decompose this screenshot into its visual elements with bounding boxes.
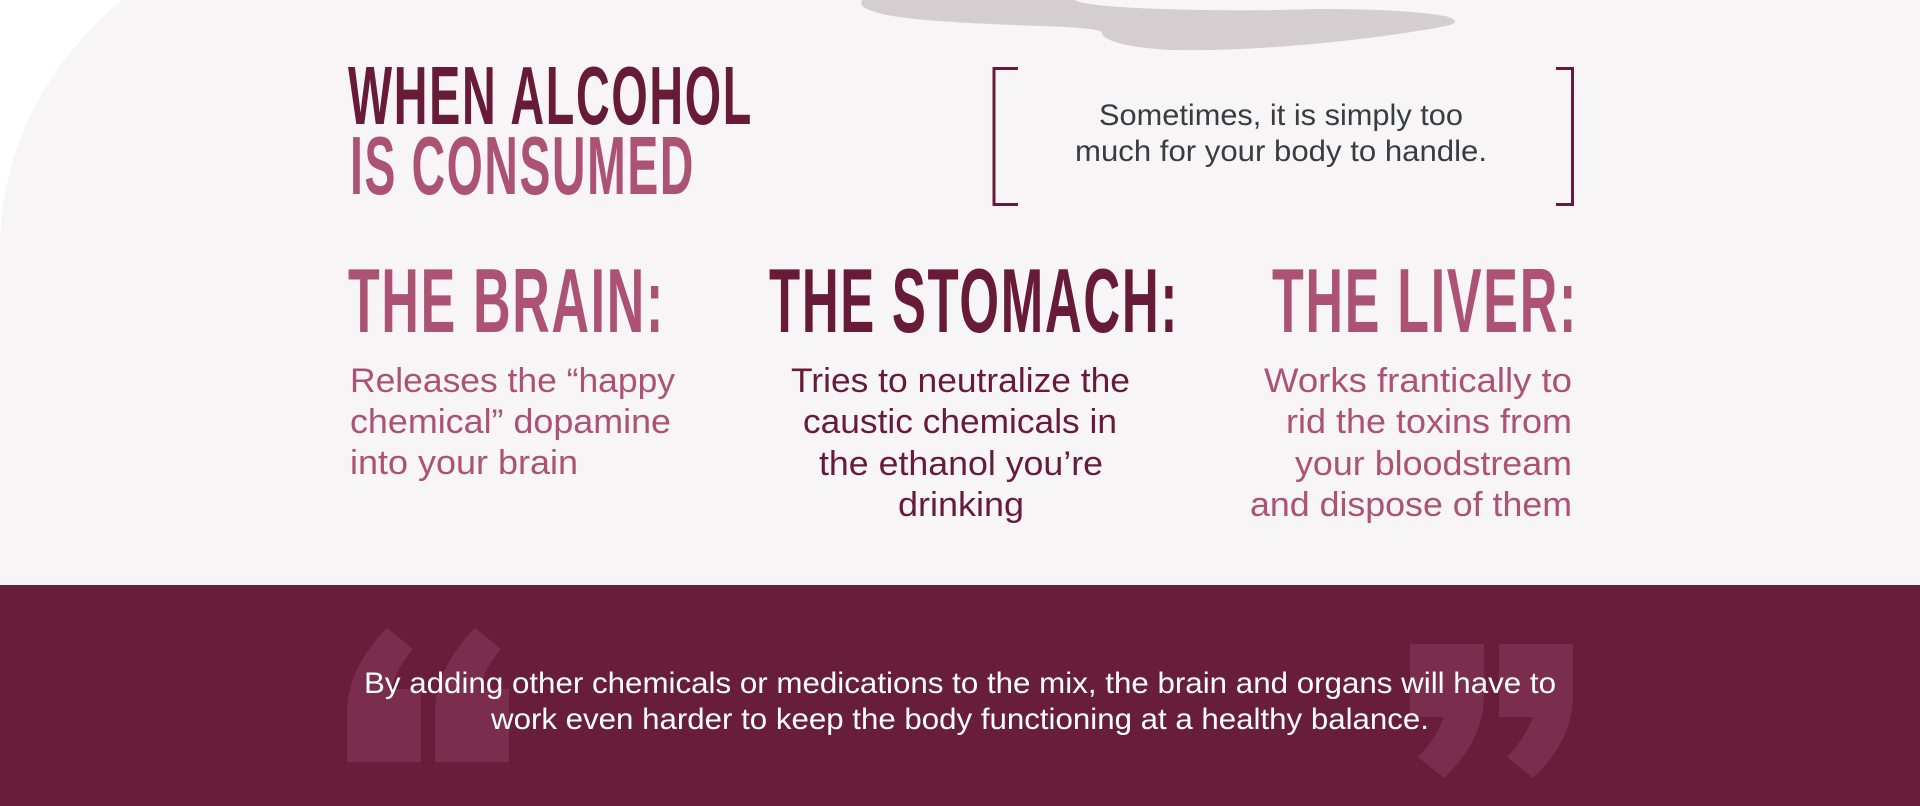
liver description bbox=[1250, 362, 1572, 524]
stomach description: the ethanol you’re bbox=[819, 445, 1103, 483]
stomach description: Tries to neutralize the bbox=[791, 362, 1130, 400]
column: the brain bbox=[348, 251, 675, 482]
liver description: your bloodstream bbox=[1295, 445, 1572, 483]
decorative shadow blob bbox=[861, 0, 1455, 50]
callout with brackets bbox=[994, 68, 1572, 204]
quote text bbox=[364, 667, 1556, 736]
icon: closing quotation mark bbox=[1410, 644, 1573, 778]
title bbox=[348, 49, 753, 212]
left bracket bbox=[994, 68, 1018, 204]
liver description: Works frantically to bbox=[1264, 362, 1572, 400]
callout text bbox=[1075, 99, 1487, 168]
title: IS CONSUMED bbox=[350, 119, 695, 212]
brain description: into your brain bbox=[350, 444, 578, 482]
title: WHEN ALCOHOL bbox=[348, 49, 753, 142]
heading: the stomach: THE STOMACH: bbox=[769, 251, 1179, 352]
liver description: and dispose of them bbox=[1250, 486, 1572, 524]
liver description: rid the toxins from bbox=[1286, 403, 1572, 441]
brain description bbox=[350, 362, 675, 482]
column: the stomach bbox=[769, 251, 1179, 524]
stomach description bbox=[791, 362, 1130, 524]
icon: opening quotation mark bbox=[347, 628, 509, 762]
stomach description: caustic chemicals in bbox=[803, 403, 1117, 441]
heading: the brain: THE BRAIN: bbox=[348, 251, 665, 352]
stomach description: drinking bbox=[898, 486, 1024, 524]
band background bbox=[0, 585, 1920, 806]
brain description: chemical” dopamine bbox=[350, 403, 671, 441]
column: the liver bbox=[1250, 251, 1578, 524]
callout text: Sometimes, it is simply too bbox=[1099, 99, 1463, 132]
quote text: By adding other chemicals or medications to the mix, the brain and organs will have to bbox=[364, 667, 1556, 700]
heading: the liver: THE LIVER: bbox=[1272, 251, 1578, 352]
quote text: work even harder to keep the body functioning at a healthy balance. bbox=[490, 703, 1429, 736]
brain description: Releases the “happy bbox=[350, 362, 675, 400]
right bracket bbox=[1556, 68, 1572, 204]
callout text: much for your body to handle. bbox=[1075, 135, 1487, 168]
panel: quote band bbox=[0, 585, 1920, 806]
